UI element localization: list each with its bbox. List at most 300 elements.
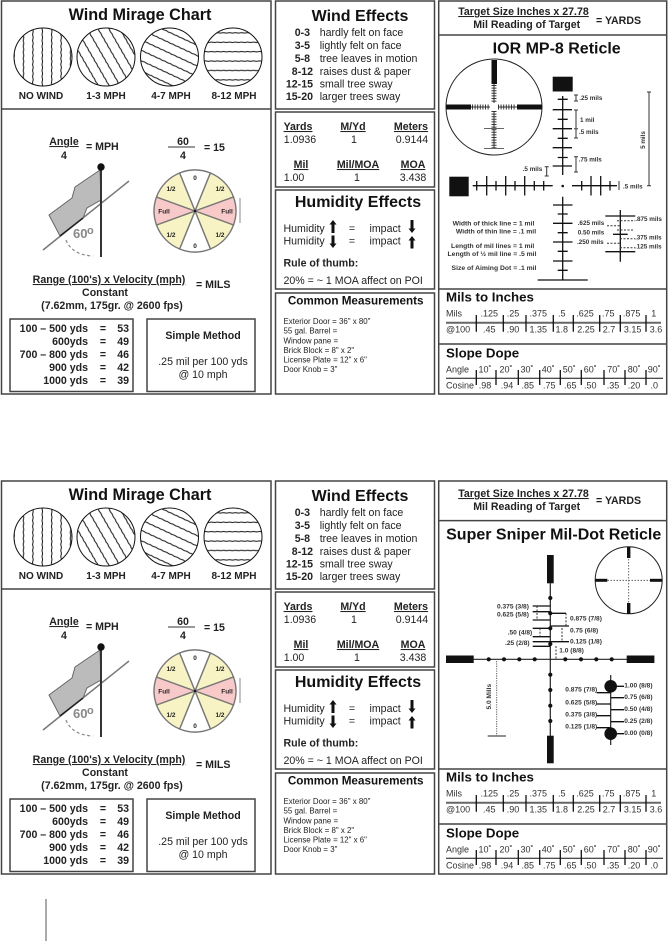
formula: range times velocity (second card): = MILS bbox=[196, 759, 230, 771]
table: slope dope (second card): .98 bbox=[479, 860, 491, 870]
panel: unit conversions bbox=[276, 112, 434, 187]
panel: common measurements: Brick Block = 8" x 2" bbox=[284, 346, 354, 355]
table: mils to inches: 2.7 bbox=[603, 325, 615, 335]
formula: range times velocity: Constant bbox=[82, 287, 128, 299]
table: mils to inches bbox=[446, 290, 662, 335]
table: constants by range: 900 yds bbox=[49, 362, 88, 374]
table: constants by range: = bbox=[100, 375, 106, 387]
panel: common measurements (second card): License Plate = 12" x 6" bbox=[284, 836, 367, 845]
chart: mil-dot sub-division detail: 0.625 (5/8) bbox=[565, 700, 597, 707]
panel: unit conversions: Meters bbox=[394, 121, 428, 133]
panel: wind effects: 3-5 bbox=[295, 40, 310, 52]
panel: common measurements bbox=[276, 293, 434, 394]
panel: humidity effects: = bbox=[349, 236, 355, 248]
formula: target size to yards bbox=[458, 6, 641, 31]
table: mils to inches: 1 bbox=[651, 309, 656, 319]
icon: scope view of mil-dot reticle bbox=[595, 547, 662, 614]
formula: range times velocity bbox=[33, 274, 230, 312]
chart: wind value clock: Full bbox=[158, 208, 170, 216]
table: constants by range (second card): 53 bbox=[117, 803, 129, 815]
chart: mil-dot sub-division detail: 0.75 (6/8) bbox=[624, 694, 653, 701]
panel: wind effects (second card): tree leaves in motion bbox=[320, 533, 418, 545]
panel: unit conversions (second card): 1 bbox=[354, 652, 360, 664]
chart: wind value clock (second card) bbox=[154, 650, 240, 732]
table: slope dope (second card): .65 bbox=[564, 860, 577, 870]
formula: angle over 4: Angle bbox=[49, 136, 79, 148]
text block: line dimensions: Width of thin line = .1 mil bbox=[456, 228, 536, 235]
table: constants by range (second card): 100 – 500 yds bbox=[20, 803, 88, 815]
table: constants by range: 700 – 800 yds bbox=[20, 349, 88, 361]
panel: wind effects (second card): 0-3 bbox=[295, 507, 310, 519]
table: mils to inches: 3.15 bbox=[624, 325, 641, 335]
panel: unit conversions: 1.00 bbox=[284, 172, 304, 184]
panel: common measurements: 55 gal. Barrel = bbox=[284, 327, 338, 336]
table: slope dope: .20 bbox=[628, 380, 640, 390]
table: slope dope (second card): 70˚ bbox=[607, 844, 620, 854]
chart: wind value clock: 1/2 bbox=[215, 186, 225, 193]
chart: mil-dot sub-division detail: 0.375 (3/8) bbox=[565, 712, 597, 719]
panel: wind effects: raises dust & paper bbox=[320, 66, 411, 78]
table: constants by range: 46 bbox=[117, 349, 129, 361]
chart: wind value clock: 1/2 bbox=[166, 232, 176, 239]
panel: humidity effects (second card): impact bbox=[370, 703, 401, 715]
table: mils to inches: .5 bbox=[558, 309, 565, 319]
chart: mil-dot sub-division detail: 1.00 (8/8) bbox=[624, 682, 653, 689]
table: mils to inches: .625 bbox=[576, 309, 594, 319]
formula: angle over 4: = 15 bbox=[204, 142, 225, 154]
panel: unit conversions (second card): Mil/MOA bbox=[337, 639, 380, 651]
chart: mil-dot reticle: 0.375 (3/8) bbox=[497, 604, 529, 610]
table: slope dope (second card): 80˚ bbox=[628, 844, 641, 854]
table: mils to inches: .125 bbox=[481, 309, 498, 319]
panel: wind effects (second card): 5-8 bbox=[295, 533, 310, 545]
table: mils to inches: .45 bbox=[483, 325, 496, 335]
panel: unit conversions (second card): Mil bbox=[294, 639, 308, 651]
panel: humidity effects: = bbox=[349, 223, 355, 235]
chart: mil-dot reticle: 0.875 (7/8) bbox=[570, 616, 602, 622]
table: slope dope (second card): .35 bbox=[607, 860, 619, 870]
chart: mil-dot sub-division detail: 0.125 (1/8) bbox=[565, 723, 597, 730]
panel: wind effects (second card): larger trees sway bbox=[320, 571, 401, 583]
table: slope dope (second card): 40˚ bbox=[542, 844, 555, 854]
panel: wind effects (second card): 12-15 bbox=[286, 558, 313, 570]
table: mils to inches (second card): .5 bbox=[558, 789, 565, 799]
chart: sub-mil ruler detail bbox=[577, 210, 662, 262]
icon: wind flag at 60 degrees (second card) bbox=[43, 643, 129, 737]
panel: common measurements (second card) bbox=[276, 773, 434, 874]
table: slope dope (second card): .0 bbox=[651, 860, 658, 870]
panel: humidity effects: impact bbox=[370, 236, 401, 248]
panel: unit conversions (second card): 0.9144 bbox=[396, 614, 428, 626]
panel: common measurements (second card): Exterior Door = 36" x 80" bbox=[284, 797, 371, 806]
icon: wind flag at 60 degrees bbox=[43, 163, 129, 257]
text block: line dimensions: Width of thick line = 1 mil bbox=[453, 220, 534, 227]
chart: wind value clock: 0 bbox=[193, 243, 197, 250]
formula: angle over 4 (second card): 60 bbox=[177, 616, 189, 628]
chart: wind value clock: 0 bbox=[193, 175, 197, 182]
chart: wind value clock (second card): Full bbox=[221, 688, 233, 696]
table: mils to inches: .25 bbox=[507, 309, 519, 319]
table: slope dope (second card): 60˚ bbox=[584, 844, 597, 854]
panel: common measurements: Common Measurements bbox=[288, 295, 424, 308]
chart: mirage circles: 8-12 MPH bbox=[211, 91, 257, 102]
table: mils to inches (second card): 1.8 bbox=[555, 805, 568, 815]
panel: humidity effects (second card): impact bbox=[370, 716, 401, 728]
panel: Super Sniper reticle column bbox=[439, 481, 667, 874]
table: mils to inches (second card): .375 bbox=[530, 789, 547, 799]
panel: humidity effects: impact bbox=[370, 223, 401, 235]
callout: simple method: @ 10 mph bbox=[178, 369, 228, 381]
panel: common measurements (second card): Door Knob = 3" bbox=[284, 845, 338, 854]
table: slope dope (second card): .20 bbox=[628, 860, 640, 870]
chart: sub-mil ruler detail: .125 mils bbox=[635, 244, 662, 251]
table: slope dope (second card): Cosine bbox=[446, 860, 474, 870]
panel: wind effects (second card): lightly felt on face bbox=[320, 520, 402, 532]
formula: angle over 4 (second card): = MPH bbox=[86, 621, 119, 633]
panel: unit conversions: Mil/MOA bbox=[337, 159, 380, 171]
table: mils to inches: Mils bbox=[446, 309, 462, 319]
formula: angle over 4: 60 bbox=[177, 136, 189, 148]
panel: humidity effects: Humidity Effects bbox=[295, 194, 421, 211]
panel: wind effects: hardly felt on face bbox=[320, 27, 403, 39]
table: constants by range (second card): = bbox=[100, 816, 106, 828]
panel: humidity effects (second card): Humidity bbox=[284, 703, 325, 715]
panel: common measurements: Window pane = bbox=[284, 336, 339, 346]
table: slope dope: .94 bbox=[501, 380, 513, 390]
panel: wind effects: 5-8 bbox=[295, 53, 310, 65]
table: constants by range (second card): 600yds bbox=[52, 816, 88, 828]
chart: sub-mil ruler detail: .250 mils bbox=[577, 239, 604, 246]
table: mils to inches (second card): 2.25 bbox=[577, 805, 595, 815]
table: mils to inches (second card): .25 bbox=[507, 789, 519, 799]
chart: mil-dot reticle: 5.0 Mills bbox=[486, 684, 493, 710]
panel: common measurements: License Plate = 12" x 6" bbox=[284, 356, 367, 365]
table: constants by range (second card) bbox=[10, 799, 133, 872]
table: constants by range (second card): 42 bbox=[117, 842, 129, 854]
panel: wind effects (second card): 8-12 bbox=[292, 546, 313, 558]
panel: common measurements: Exterior Door = 36" x 80" bbox=[284, 317, 371, 326]
chart: wind value clock (second card): 0 bbox=[193, 655, 197, 662]
callout: simple method (second card): .25 mil per 100 yds bbox=[158, 836, 248, 848]
panel: wind effects (second card): Wind Effects bbox=[312, 488, 408, 505]
panel: humidity effects (second card) bbox=[276, 670, 434, 769]
chart: mirage circles: 1-3 MPH bbox=[86, 91, 126, 102]
chart: enlarged reticle with mil dimensions: .5 mils bbox=[523, 166, 543, 173]
chart: wind value clock (second card): 1/2 bbox=[166, 666, 176, 673]
table: slope dope (second card): .50 bbox=[584, 860, 597, 870]
table: mils to inches: 3.6 bbox=[650, 325, 662, 335]
table: mils to inches (second card): Mils bbox=[446, 789, 462, 799]
table: mils to inches (second card): .90 bbox=[507, 805, 519, 815]
panel: humidity effects: 20% = ~ 1 MOA affect on POI bbox=[284, 275, 423, 287]
table: mils to inches (second card) bbox=[446, 770, 662, 815]
text block: line dimensions: Length of ½ mil line = .5 mil bbox=[448, 250, 537, 258]
chart: wind value clock: 1/2 bbox=[215, 232, 225, 239]
table: slope dope: 50˚ bbox=[563, 364, 576, 374]
table: constants by range: = bbox=[100, 323, 106, 335]
panel: wind effects (second card) bbox=[276, 481, 434, 589]
table: mils to inches (second card): 1 bbox=[651, 789, 656, 799]
callout: simple method: .25 mil per 100 yds bbox=[158, 356, 248, 368]
formula: range times velocity: Range (100's) x Velocity (mph) bbox=[33, 274, 185, 286]
table: mils to inches (second card): .125 bbox=[481, 789, 498, 799]
table: constants by range (second card): 900 yds bbox=[49, 842, 88, 854]
panel: unit conversions (second card): M/Yd bbox=[340, 601, 366, 613]
icon: wind flag at 60 degrees: 60 bbox=[73, 226, 87, 241]
panel: wind effects (second card): hardly felt on face bbox=[320, 507, 403, 519]
chart: sub-mil ruler detail: .375 mils bbox=[635, 234, 662, 241]
table: slope dope: 10˚ bbox=[478, 364, 492, 374]
panel: wind effects: 0-3 bbox=[295, 27, 310, 39]
chart: enlarged reticle with mil dimensions: .5 mils bbox=[579, 129, 599, 136]
formula: range times velocity (second card): Constant bbox=[82, 767, 128, 779]
panel: humidity effects (second card): = bbox=[349, 703, 355, 715]
callout: simple method (second card): Simple Method bbox=[165, 810, 241, 822]
chart: sub-mil ruler detail: .625 mils bbox=[578, 220, 605, 227]
table: constants by range (second card): = bbox=[100, 829, 106, 841]
text block: line dimensions bbox=[448, 220, 537, 272]
panel: common measurements (second card): Brick Block = 8" x 2" bbox=[284, 826, 354, 835]
chart: mil-dot sub-division detail: 0.50 (4/8) bbox=[624, 706, 653, 713]
chart: wind value clock bbox=[154, 170, 240, 252]
chart: wind value clock (second card): 1/2 bbox=[215, 712, 225, 719]
table: constants by range (second card): = bbox=[100, 803, 106, 815]
panel: unit conversions: M/Yd bbox=[340, 121, 366, 133]
formula: target size to yards (second card): Mil Reading of Target bbox=[473, 501, 581, 513]
chart: wind value clock (second card): 1/2 bbox=[166, 712, 176, 719]
chart: mil-dot sub-division detail: 0.00 (0/8) bbox=[624, 730, 653, 737]
formula: target size to yards (second card): = YARDS bbox=[596, 495, 641, 507]
table: constants by range (second card): = bbox=[100, 855, 106, 867]
formula: target size to yards (second card): Target Size Inches x 27.78 bbox=[458, 488, 589, 500]
callout: simple method: Simple Method bbox=[165, 330, 241, 342]
panel: wind effects: larger trees sway bbox=[320, 91, 401, 103]
table: slope dope: .75 bbox=[543, 380, 556, 390]
table: constants by range: 49 bbox=[117, 336, 129, 348]
title: Wind Mirage Chart: Wind Mirage Chart bbox=[69, 6, 212, 24]
chart: mirage circles (second card): 4-7 MPH bbox=[151, 571, 191, 582]
chart: mirage circles: 4-7 MPH bbox=[151, 91, 191, 102]
chart: mil-dot reticle: .50 (4/8) bbox=[508, 629, 532, 636]
panel: humidity effects: Rule of thumb: bbox=[284, 258, 358, 270]
formula: target size to yards (second card) bbox=[458, 488, 641, 513]
table: slope dope: .65 bbox=[564, 380, 577, 390]
panel: humidity effects (second card): = bbox=[349, 716, 355, 728]
panel: unit conversions: 1 bbox=[354, 172, 360, 184]
panel: wind effects: Wind Effects bbox=[312, 8, 408, 25]
table: mils to inches (second card): .75 bbox=[602, 789, 615, 799]
formula: target size to yards: = YARDS bbox=[596, 15, 641, 27]
chart: sub-mil ruler detail: .875 mils bbox=[635, 216, 662, 223]
table: slope dope (second card): 20˚ bbox=[499, 844, 513, 854]
panel: wind mirage and wind formula (second card) bbox=[2, 481, 271, 874]
table: mils to inches: Mils to Inches bbox=[446, 290, 534, 305]
table: mils to inches: .375 bbox=[530, 309, 547, 319]
panel: humidity effects (second card): Humidity Effects bbox=[295, 674, 421, 691]
panel: humidity effects (second card): Rule of thumb: bbox=[284, 738, 358, 750]
table: mils to inches: @100 bbox=[446, 325, 470, 335]
panel: humidity effects: Humidity bbox=[284, 236, 325, 248]
panel: wind effects: lightly felt on face bbox=[320, 40, 402, 52]
panel: unit conversions: 0.9144 bbox=[396, 134, 428, 146]
table: mils to inches: 1.8 bbox=[555, 325, 568, 335]
formula: angle over 4: = MPH bbox=[86, 141, 119, 153]
table: constants by range: = bbox=[100, 362, 106, 374]
chart: mil-dot sub-division detail: 0.25 (2/8) bbox=[624, 718, 653, 725]
table: slope dope (second card) bbox=[446, 826, 663, 870]
panel: wind effects bbox=[276, 1, 434, 109]
panel: humidity effects bbox=[276, 190, 434, 289]
chart: wind value clock: Full bbox=[221, 208, 233, 216]
panel: unit conversions (second card): 3.438 bbox=[400, 652, 426, 664]
table: slope dope (second card): Slope Dope bbox=[446, 826, 519, 841]
table: constants by range (second card): 1000 yds bbox=[43, 855, 88, 867]
panel: unit conversions: 1 bbox=[351, 134, 357, 146]
table: mils to inches (second card): .45 bbox=[483, 805, 496, 815]
table: mils to inches (second card): 3.15 bbox=[624, 805, 641, 815]
table: slope dope: .50 bbox=[584, 380, 597, 390]
chart: mil-dot reticle: 0.125 (1/8) bbox=[570, 638, 602, 646]
chart: mil-dot sub-division detail bbox=[565, 675, 653, 745]
callout: simple method (second card): @ 10 mph bbox=[178, 849, 228, 861]
title: IOR MP-8 Reticle: IOR MP-8 Reticle bbox=[493, 40, 621, 58]
card: Super Sniper data card bbox=[2, 481, 667, 874]
callout: simple method (second card) bbox=[147, 799, 255, 872]
table: constants by range (second card): = bbox=[100, 842, 106, 854]
formula: target size to yards: Mil Reading of Target bbox=[473, 19, 581, 31]
panel: common measurements: Door Knob = 3" bbox=[284, 365, 338, 374]
table: constants by range: 39 bbox=[117, 375, 129, 387]
table: slope dope (second card): 90˚ bbox=[648, 844, 661, 854]
panel: wind effects (second card): 15-20 bbox=[286, 571, 313, 583]
chart: mirage circles (second card) bbox=[14, 508, 262, 582]
table: slope dope: 30˚ bbox=[520, 364, 534, 374]
table: mils to inches: .75 bbox=[602, 309, 615, 319]
chart: mirage circles (second card): NO WIND bbox=[19, 571, 63, 582]
table: mils to inches: 1.35 bbox=[530, 325, 547, 335]
panel: wind effects: small tree sway bbox=[320, 78, 393, 90]
panel: IOR reticle column bbox=[439, 1, 667, 394]
panel: unit conversions: 1.0936 bbox=[284, 134, 316, 146]
panel: common measurements (second card): 55 gal. Barrel = bbox=[284, 807, 338, 816]
panel: wind effects (second card): raises dust & paper bbox=[320, 546, 411, 558]
panel: unit conversions: Mil bbox=[294, 159, 308, 171]
icon: wind flag at 60 degrees (second card): o bbox=[87, 705, 94, 717]
panel: unit conversions: MOA bbox=[401, 159, 426, 171]
panel: unit conversions (second card) bbox=[276, 592, 434, 667]
formula: range times velocity (second card): (7.62mm, 175gr. @ 2600 fps) bbox=[41, 780, 183, 792]
table: slope dope (second card): .75 bbox=[543, 860, 556, 870]
chart: sub-mil ruler detail: 0.50 mils bbox=[578, 230, 605, 237]
chart: wind value clock: 1/2 bbox=[166, 186, 176, 193]
table: constants by range: = bbox=[100, 349, 106, 361]
table: slope dope: 60˚ bbox=[584, 364, 597, 374]
panel: wind effects (second card): small tree sway bbox=[320, 558, 393, 570]
chart: enlarged reticle with mil dimensions bbox=[449, 77, 651, 280]
table: slope dope (second card): .94 bbox=[501, 860, 513, 870]
table: slope dope (second card): 10˚ bbox=[478, 844, 492, 854]
table: constants by range (second card): 39 bbox=[117, 855, 129, 867]
table: constants by range: 53 bbox=[117, 323, 129, 335]
icon: wind flag at 60 degrees: o bbox=[87, 225, 94, 237]
title: Super Sniper Mil-Dot Reticle: Super Sniper Mil-Dot Reticle bbox=[446, 526, 661, 543]
table: slope dope: 90˚ bbox=[648, 364, 661, 374]
formula: angle over 4 (second card): 4 bbox=[61, 630, 67, 642]
table: constants by range: 1000 yds bbox=[43, 375, 88, 387]
panel: wind effects: 15-20 bbox=[286, 91, 313, 103]
table: slope dope: 40˚ bbox=[542, 364, 555, 374]
table: mils to inches: .90 bbox=[507, 325, 519, 335]
table: slope dope: .35 bbox=[607, 380, 619, 390]
formula: angle over 4 bbox=[49, 136, 225, 162]
panel: humidity effects: Humidity bbox=[284, 223, 325, 235]
panel: wind effects: 8-12 bbox=[292, 66, 313, 78]
panel: wind effects: tree leaves in motion bbox=[320, 53, 418, 65]
table: mils to inches (second card): .625 bbox=[576, 789, 594, 799]
panel: common measurements (second card): Window pane = bbox=[284, 816, 339, 826]
table: constants by range: 100 – 500 yds bbox=[20, 323, 88, 335]
table: constants by range: 600yds bbox=[52, 336, 88, 348]
table: slope dope bbox=[446, 346, 663, 390]
chart: enlarged reticle with mil dimensions: 5 mils bbox=[640, 131, 647, 149]
chart: wind value clock (second card): 1/2 bbox=[215, 666, 225, 673]
table: constants by range (second card): 700 – 800 yds bbox=[20, 829, 88, 841]
formula: angle over 4 (second card) bbox=[49, 616, 225, 642]
chart: enlarged reticle with mil dimensions: .5 mils bbox=[623, 184, 643, 190]
chart: mil-dot reticle bbox=[446, 555, 654, 763]
panel: unit conversions (second card): Meters bbox=[394, 601, 428, 613]
chart: enlarged reticle with mil dimensions: 1 mil bbox=[580, 117, 595, 124]
formula: range times velocity: = MILS bbox=[196, 279, 230, 291]
table: slope dope: 20˚ bbox=[499, 364, 513, 374]
table: slope dope: 70˚ bbox=[607, 364, 620, 374]
table: slope dope: 80˚ bbox=[628, 364, 641, 374]
panel: wind effects: 12-15 bbox=[286, 78, 313, 90]
text block: line dimensions: Length of mil lines = 1 mil bbox=[451, 243, 534, 250]
chart: enlarged reticle with mil dimensions: .25 mils bbox=[579, 95, 603, 102]
formula: target size to yards: Target Size Inches x 27.78 bbox=[458, 6, 589, 18]
table: slope dope: .98 bbox=[479, 380, 491, 390]
formula: angle over 4: 4 bbox=[61, 150, 67, 162]
table: constants by range: 42 bbox=[117, 362, 129, 374]
table: constants by range bbox=[10, 319, 133, 392]
table: constants by range: = bbox=[100, 336, 106, 348]
icon: scope view of reticle bbox=[446, 59, 542, 155]
panel: humidity effects (second card): 20% = ~ 1 MOA affect on POI bbox=[284, 755, 423, 767]
panel: unit conversions: Yards bbox=[284, 121, 313, 133]
formula: angle over 4 (second card): = 15 bbox=[204, 622, 225, 634]
chart: mirage circles (second card): 8-12 MPH bbox=[211, 571, 257, 582]
chart: mil-dot reticle: 1.0 (8/8) bbox=[559, 647, 584, 654]
formula: angle over 4 (second card): Angle bbox=[49, 616, 79, 628]
panel: unit conversions (second card): Yards bbox=[284, 601, 313, 613]
panel: wind mirage and wind formula bbox=[2, 1, 271, 394]
panel: wind effects (second card): 3-5 bbox=[295, 520, 310, 532]
callout: simple method bbox=[147, 319, 255, 392]
panel: humidity effects (second card): Humidity bbox=[284, 716, 325, 728]
panel: unit conversions (second card): 1.0936 bbox=[284, 614, 316, 626]
table: slope dope: Slope Dope bbox=[446, 346, 519, 361]
formula: range times velocity (second card): Range (100's) x Velocity (mph) bbox=[33, 754, 185, 766]
formula: range times velocity: (7.62mm, 175gr. @ 2600 fps) bbox=[41, 300, 183, 312]
table: slope dope: .0 bbox=[651, 380, 658, 390]
chart: mil-dot reticle: .25 (2/8) bbox=[505, 640, 530, 647]
table: slope dope (second card): 30˚ bbox=[520, 844, 534, 854]
panel: unit conversions (second card): 1.00 bbox=[284, 652, 304, 664]
panel: common measurements (second card): Common Measurements bbox=[288, 775, 424, 788]
card: IOR MP-8 data card bbox=[2, 1, 667, 394]
chart: wind value clock (second card): Full bbox=[158, 688, 170, 696]
